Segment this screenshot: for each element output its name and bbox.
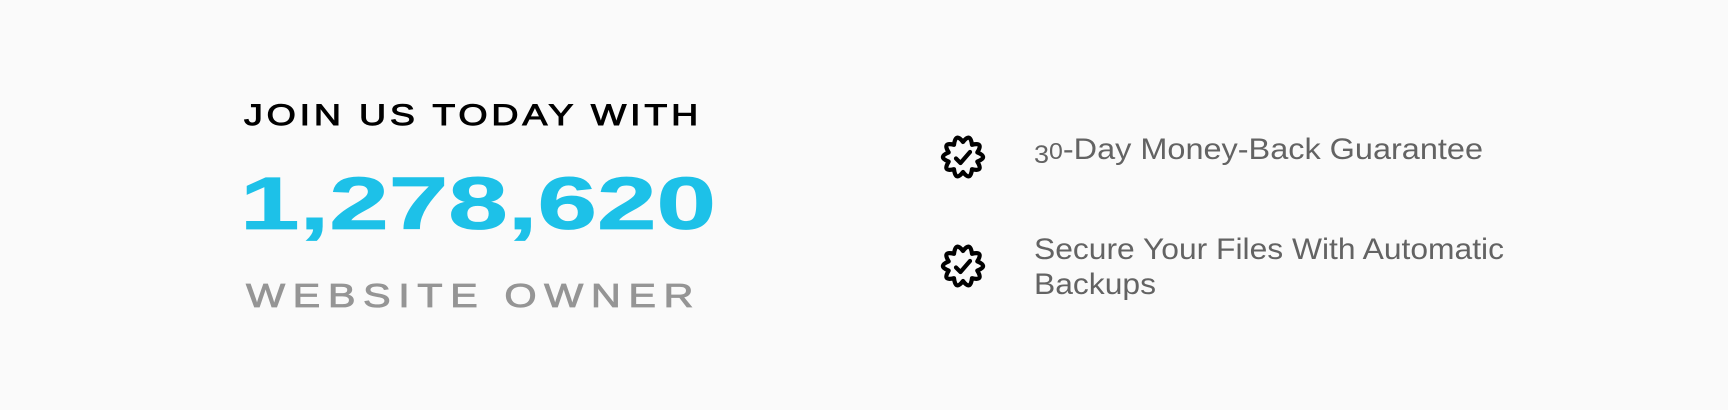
panel: subscriber counter — [240, 99, 716, 314]
icon: verified badge, backups — [943, 247, 983, 285]
text: money-back guarantee: 3 — [1034, 141, 1049, 169]
text: automatic backups: Secure Your Files With Automatic — [1034, 233, 1504, 266]
text: automatic backups — [1034, 233, 1504, 301]
text: money-back guarantee: -Day Money-Back Guarantee — [1063, 133, 1451, 166]
icon: verified badge, money-back — [943, 138, 983, 176]
counter number: 1,278,620 — [240, 162, 716, 245]
text: automatic backups: Backups — [1034, 268, 1156, 301]
heading: join us today with: JOIN US TODAY WITH — [244, 99, 702, 132]
subheading: website owner: WEBSITE OWNER — [246, 277, 701, 314]
panel: guarantees — [943, 133, 1504, 301]
text: money-back guarantee: 0 — [1049, 138, 1063, 164]
